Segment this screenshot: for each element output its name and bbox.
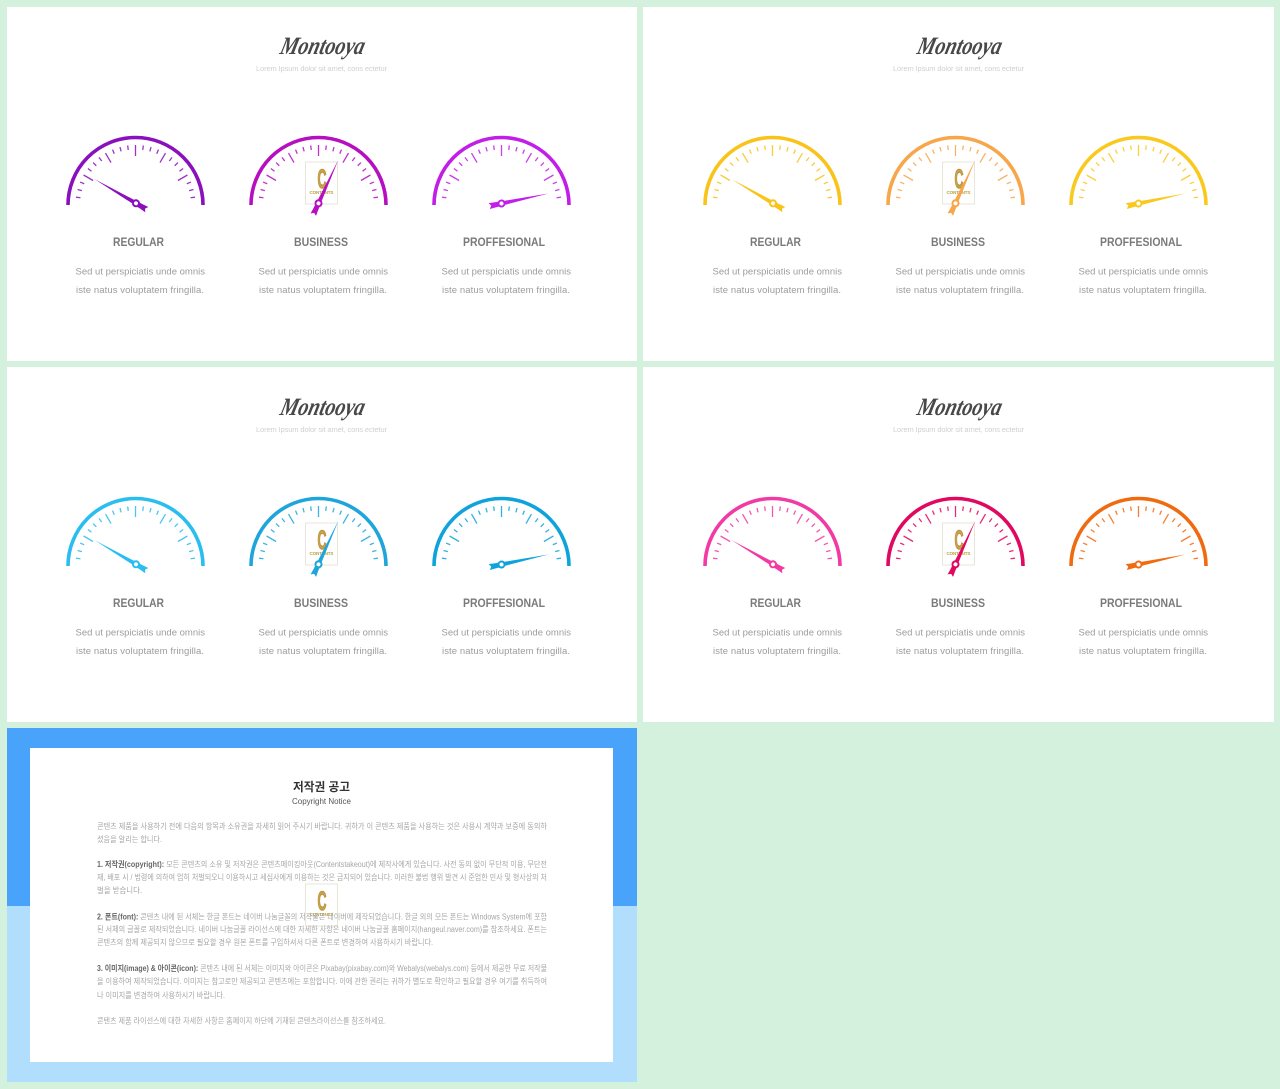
label: business: iste natus voluptatem fringilla. [896,285,1024,296]
notice body text: 을 이용하여 제작되었습니다. 이미지는 참고로만 제공되고 콘텐츠에는 포함합니다. 이에 관한 권리는 귀하가 별도로 확인하고 필요할 경우 여기를 취득하여 [97,976,547,986]
watermark logo: CONTENTS [310,912,334,917]
notice body text: 콘텐츠 제품을 사용하기 전에 다음의 항목과 소유권을 자세히 읽어 주시기 바랍니다. 귀하가 이 콘텐츠 제품을 사용하는 것은 사용시 계약과 보증에 동의하 [97,821,548,831]
label: proffesional: Sed ut perspiciatis unde omnis [1078,266,1208,278]
title: Montooya [914,393,1006,421]
label: proffesional: PROFFESIONAL [1100,235,1182,249]
label: proffesional [442,596,571,657]
subtitle: Lorem Ipsum dolor sit amet, cons ectetur [256,425,388,434]
label: proffesional: Sed ut perspiciatis unde omnis [442,266,571,278]
label: regular [76,235,205,296]
notice body text: 된 서체의 글꼴로 제작되었습니다. 네이버 나눔글꼴 라이선스에 대한 자세한 사항은 네이버 나눔글꼴 홈페이지(hangeul.naver.com)를 참조하세요. 폰트는 [97,924,547,934]
label: business: Sed ut perspiciatis unde omnis [258,628,388,638]
gauge: proffesional [1071,498,1206,570]
panel: pink and orange gauges [643,367,1274,722]
watermark logo: C [318,886,326,916]
watermark logo: CONTENTS [946,190,970,195]
label: business [896,235,1025,296]
gauge: business [251,138,386,216]
label: regular [712,235,842,296]
gauge: proffesional [434,138,569,209]
watermark logo [306,162,338,204]
notice heading: 저작권 공고 [293,779,350,794]
label: regular: REGULAR [113,235,164,249]
label: regular: Sed ut perspiciatis unde omnis [76,628,205,638]
watermark logo [942,523,974,565]
gauge: regular [705,498,840,573]
label: regular [76,596,205,657]
notice body text: 재, 배포 시 / 법령에 의하여 엄히 처벌되오니 이용하시고 세심사에게 이용하는 것은 금지되어 있습니다. 이러한 불법 행위 발견 시 준엄한 민사 및 형사상의 처 [97,872,547,882]
notice body text: 콘텐츠 제품 라이선스에 대한 자세한 사항은 홈페이지 하단에 기재된 콘텐츠라이선스를 참조하세요. [97,1016,386,1026]
subtitle: Lorem Ipsum dolor sit amet, cons ectetur [256,64,388,73]
label: proffesional [442,235,571,296]
label: proffesional: iste natus voluptatem fringilla. [1079,285,1207,296]
panel: yellow gauges [643,7,1274,361]
label: business: iste natus voluptatem fringilla. [259,285,387,296]
label: proffesional [1078,596,1208,657]
label: regular: Sed ut perspiciatis unde omnis [712,266,842,278]
label: proffesional: Sed ut perspiciatis unde omnis [442,628,571,638]
panel: purple gauges [7,7,637,361]
label: regular: REGULAR [113,596,164,610]
watermark logo: C [318,164,326,194]
watermark logo [306,523,338,565]
notice body text: 3. 이미지(image) & 아이콘(icon): 콘텐츠 내에 된 서체는 이미지와 아이콘은 Pixabay(pixabay.com)와 Webalys(webalys.com) 등에서 제공한 무료 저작물 [97,963,547,973]
notice body text: 벌을 받습니다. [97,885,142,895]
label: regular: iste natus voluptatem fringilla. [713,285,841,296]
gauge: proffesional [1071,138,1206,209]
notice body text: 셨음을 알리는 합니다. [97,834,162,844]
subtitle: Lorem Ipsum dolor sit amet, cons ectetur [893,64,1024,73]
label: business: BUSINESS [931,596,985,610]
notice body text [97,821,548,1026]
label: proffesional [1078,235,1208,296]
label: business [896,596,1025,657]
watermark logo: C [954,525,964,555]
label: business: iste natus voluptatem fringilla. [896,646,1024,657]
notice subheading: Copyright Notice [292,797,352,806]
panel: copyright notice [7,728,637,1082]
label: business: Sed ut perspiciatis unde omnis [896,266,1025,278]
label: business: Sed ut perspiciatis unde omnis [258,266,388,278]
notice body text: 2. 폰트(font): 콘텐츠 내에 된 서체는 한글 폰트는 네이버 나눔글꼴의 저작물은 네이버에 제작되었습니다. 한글 외의 모든 폰트는 Windows System에 포함 [97,912,548,922]
label: proffesional: PROFFESIONAL [463,596,545,610]
label: proffesional: iste natus voluptatem fringilla. [1079,646,1207,657]
watermark logo: CONTENTS [946,551,970,556]
subtitle: Lorem Ipsum dolor sit amet, cons ectetur [893,425,1024,434]
title: Montooya [277,393,369,421]
label: regular: iste natus voluptatem fringilla. [76,285,204,296]
title: Montooya [914,32,1006,60]
gauge: business [888,498,1023,577]
notice body text: 나 이미지를 변경하여 사용하시기 바랍니다. [97,990,225,1000]
watermark logo: C [954,164,964,194]
label: business [258,235,388,296]
gauge: regular [705,138,840,212]
gauge: regular [68,138,203,212]
watermark logo: CONTENTS [310,190,334,195]
label: regular: Sed ut perspiciatis unde omnis [76,266,205,278]
label: proffesional: iste natus voluptatem fringilla. [442,646,570,657]
label: regular: Sed ut perspiciatis unde omnis [712,628,842,638]
label: business: BUSINESS [931,235,985,249]
notice body text: 1. 저작권(copyright): 모든 콘텐츠의 소유 및 저작권은 콘텐츠메이킹아웃(Contentstakeout)에 제작사에게 있습니다. 사전 동의 없이 무단적 이용, 무단전 [97,859,547,869]
label: business: BUSINESS [294,235,348,249]
label: proffesional: PROFFESIONAL [1100,596,1182,610]
label: regular: REGULAR [750,596,801,610]
watermark logo: C [318,525,326,555]
gauge: regular [68,498,203,573]
panel: blue gauges [7,367,637,722]
watermark logo: CONTENTS [310,551,334,556]
title: Montooya [277,32,369,60]
notice body text: 콘텐츠의 함께 제공되지 않으므로 필요할 경우 원본 폰트를 구입하셔서 다른 폰트로 변경하여 사용하시기 바랍니다. [97,937,433,947]
label: business: Sed ut perspiciatis unde omnis [896,628,1025,638]
label: business [258,596,388,657]
label: proffesional: iste natus voluptatem fringilla. [442,285,570,296]
gauge: proffesional [434,498,569,570]
gauge: business [251,498,386,577]
label: business: BUSINESS [294,596,348,610]
label: regular: REGULAR [750,235,801,249]
label: proffesional: Sed ut perspiciatis unde omnis [1078,628,1208,638]
gauge: business [888,138,1023,216]
label: regular [712,596,842,657]
watermark logo [942,162,974,204]
watermark logo [306,884,338,926]
label: business: iste natus voluptatem fringilla. [259,646,387,657]
label: proffesional: PROFFESIONAL [463,235,545,249]
label: regular: iste natus voluptatem fringilla. [713,646,841,657]
label: regular: iste natus voluptatem fringilla. [76,646,204,657]
